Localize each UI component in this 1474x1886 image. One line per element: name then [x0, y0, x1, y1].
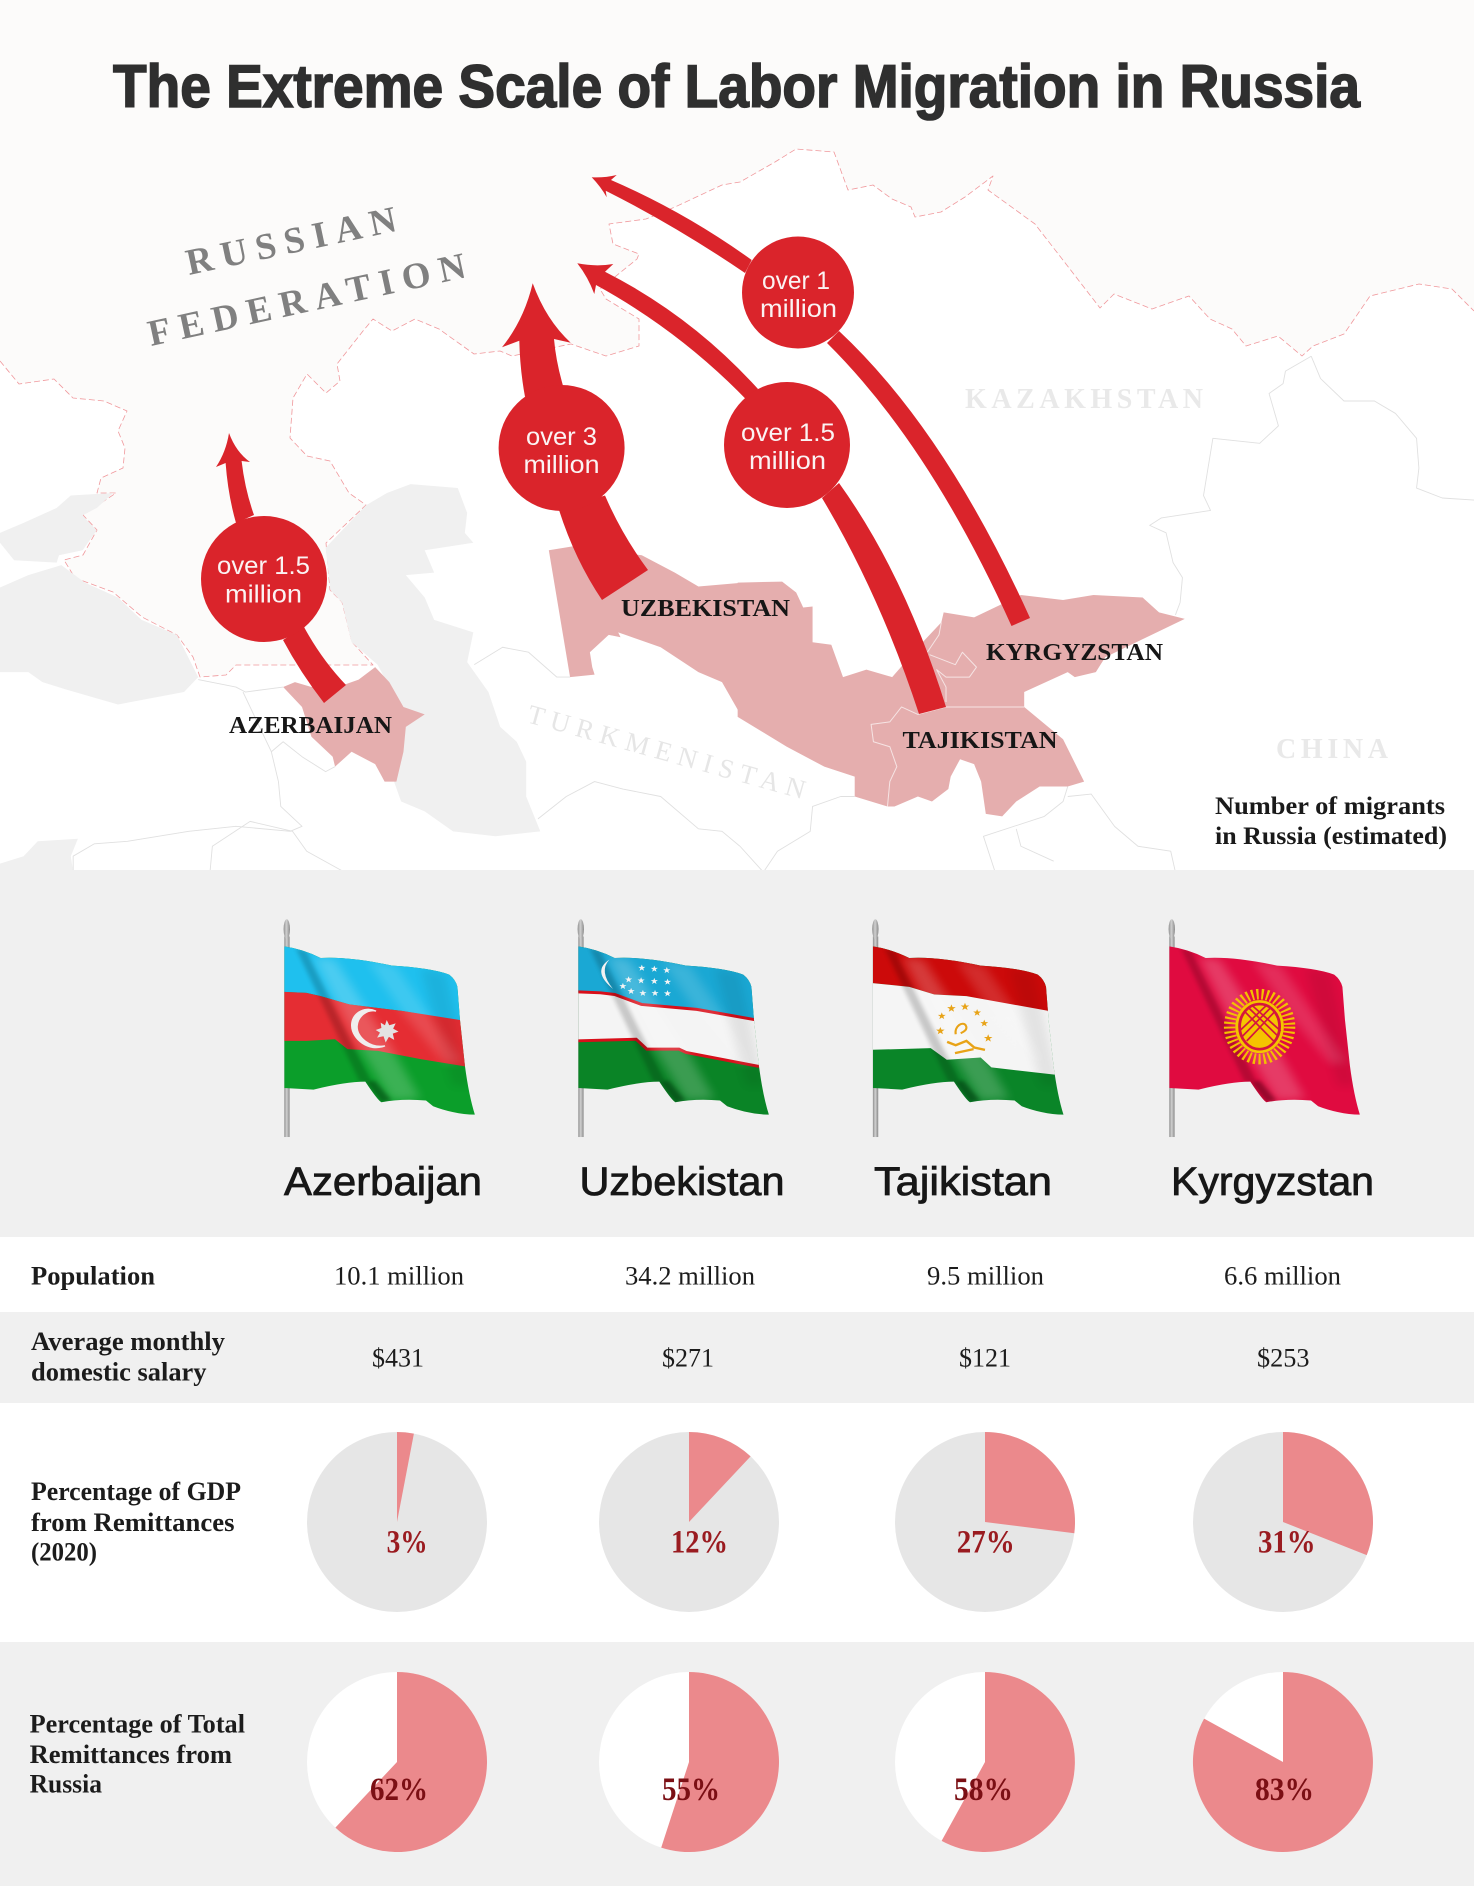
highlighted country: Azerbaijan: [283, 667, 425, 782]
row: population: [0, 1237, 1474, 1312]
row: percentage of total remittances from Russia: [0, 1642, 1474, 1886]
title: The Extreme Scale of Labor Migration in Russia: [113, 53, 1361, 120]
pie: Tajikistan 58%: [895, 1672, 1075, 1852]
pie: Uzbekistan 55%: 55%: [662, 1772, 720, 1808]
pie: Tajikistan 27%: [895, 1432, 1075, 1612]
country name: Kyrgyzstan: Kyrgyzstan: [1171, 1160, 1374, 1204]
label: Russian Federation: RUSSIAN: [182, 199, 400, 284]
label: Turkmenistan: TURKMENISTAN: [524, 699, 809, 805]
pie: Azerbaijan 3%: [307, 1432, 487, 1612]
row label: [31, 1477, 241, 1566]
arrow: Uzbekistan: [499, 283, 648, 600]
row: population: 34.2 million: [625, 1262, 755, 1290]
panel: flags header: [0, 870, 1474, 1237]
arrow: Kyrgyzstan: over 1: [762, 267, 830, 295]
pie: Uzbekistan 12%: [599, 1432, 779, 1612]
panel: map: [0, 0, 1474, 872]
legend: number of migrants: in Russia (estimated): [1215, 823, 1447, 850]
pie: Azerbaijan 62%: [307, 1672, 487, 1852]
arrow: Tajikistan: million: [749, 447, 826, 475]
country name: Tajikistan: Tajikistan: [874, 1160, 1052, 1204]
arrow: Kyrgyzstan: [592, 175, 1030, 626]
pie: Tajikistan 58%: 58%: [954, 1772, 1013, 1808]
label: China: CHINA: [1276, 734, 1389, 765]
label: Azerbaijan: AZERBAIJAN: [229, 713, 393, 739]
pie: Uzbekistan 55%: [599, 1672, 779, 1852]
legend: number of migrants: Number of migrants: [1215, 793, 1445, 820]
highlighted countries: Uzbekistan east, Kyrgyzstan, Tajikistan: [738, 582, 1185, 816]
legend: number of migrants: [1215, 793, 1447, 850]
row: average monthly domestic salary: domestic salary: [31, 1358, 206, 1386]
arrow: Uzbekistan: million: [524, 451, 600, 479]
flag: Azerbaijan: [281, 919, 481, 1137]
flag: Uzbekistan: [575, 919, 775, 1137]
row: population: Population: [31, 1262, 156, 1290]
pie: Kyrgyzstan 83%: [1193, 1672, 1373, 1852]
row label: Russia: [30, 1770, 102, 1798]
country name: Uzbekistan: Uzbekistan: [580, 1160, 784, 1204]
arrow: Tajikistan: over 1.5: [741, 419, 835, 447]
arrow: Azerbaijan: million: [225, 580, 302, 608]
pie: Azerbaijan 62%: 62%: [370, 1772, 428, 1808]
arrow: Azerbaijan: [201, 433, 346, 703]
row label: Percentage of Total: [30, 1710, 245, 1738]
pie: Kyrgyzstan 83%: 83%: [1255, 1772, 1314, 1808]
row: average monthly domestic salary: Average monthly: [31, 1327, 225, 1356]
highlighted country: Uzbekistan west: [549, 546, 743, 719]
arrow: Kyrgyzstan: million: [760, 295, 837, 323]
row: average monthly domestic salary: [0, 1312, 1474, 1403]
flag: Kyrgyzstan: [1166, 919, 1366, 1137]
row: population: 6.6 million: [1224, 1262, 1341, 1290]
row: population: 9.5 million: [927, 1262, 1044, 1290]
row: average monthly domestic salary: $431: [372, 1344, 424, 1372]
row label: (2020): [31, 1538, 97, 1566]
map region: seas and western borders: [0, 484, 740, 872]
pie: Kyrgyzstan 31%: 31%: [1258, 1524, 1316, 1560]
label: Kyrgyzstan: KYRGYZSTAN: [986, 640, 1164, 666]
row: average monthly domestic salary: $121: [959, 1344, 1011, 1372]
row: population: 10.1 million: [334, 1262, 464, 1290]
pie: Azerbaijan 3%: 3%: [387, 1524, 428, 1560]
label: Kazakhstan: KAZAKHSTAN: [965, 384, 1203, 415]
country name: Azerbaijan: Azerbaijan: [284, 1160, 482, 1204]
pie: Uzbekistan 12%: 12%: [671, 1524, 728, 1560]
map region: eastern borders: [740, 356, 1474, 872]
row: percentage of GDP from remittances: [0, 1403, 1474, 1642]
row: average monthly domestic salary: $271: [662, 1344, 714, 1372]
row label: from Remittances: [31, 1508, 234, 1537]
pie: Tajikistan 27%: 27%: [957, 1524, 1015, 1560]
row label: Remittances from: [30, 1740, 232, 1769]
map region: Russian Federation: [0, 0, 1474, 677]
pie: Kyrgyzstan 31%: [1193, 1432, 1373, 1612]
label: Russian Federation: FEDERATION: [144, 246, 470, 355]
label: Uzbekistan: UZBEKISTAN: [621, 596, 791, 622]
row label: Percentage of GDP: [31, 1477, 241, 1506]
flag: Tajikistan: [870, 919, 1070, 1137]
row label: [30, 1710, 245, 1798]
label: Tajikistan: TAJIKISTAN: [902, 728, 1058, 754]
row: average monthly domestic salary: $253: [1257, 1344, 1310, 1372]
arrow: Uzbekistan: over 3: [526, 423, 597, 451]
arrow: Tajikistan: [577, 263, 946, 714]
arrow: Azerbaijan: over 1.5: [217, 552, 310, 580]
